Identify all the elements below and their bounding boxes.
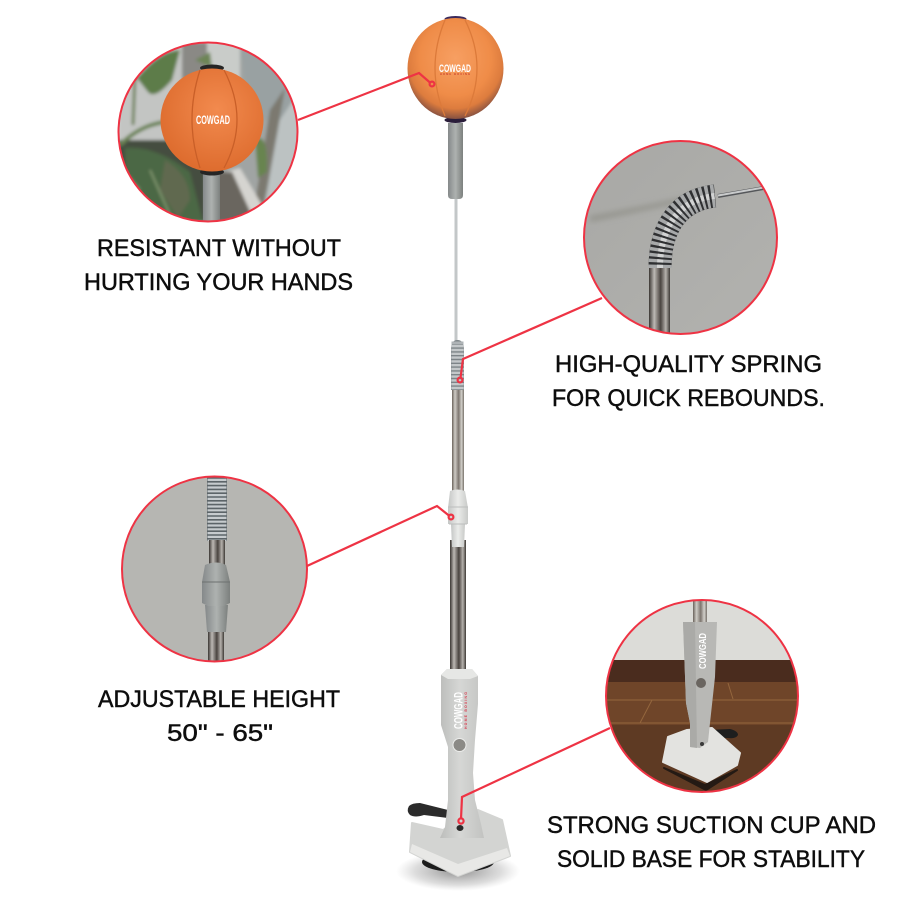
product: punching stand: [396, 16, 520, 891]
ring: [122, 476, 307, 662]
base shadow: [664, 768, 737, 790]
ring: [584, 141, 777, 334]
caption: ball: RESISTANT WITHOUT: [97, 235, 341, 262]
ring: [118, 42, 298, 222]
caption: base: [547, 812, 876, 873]
stand logo: HOME BOXING: [464, 692, 468, 729]
caption: spring: [552, 351, 825, 412]
photo: [584, 141, 778, 338]
photo: COWGAD: [196, 115, 230, 127]
panel: ball close-up: [118, 42, 300, 224]
orange ball: COWGAD: [439, 63, 471, 75]
height adjustment collar: [448, 490, 468, 547]
column top: [441, 669, 478, 679]
photo: [122, 475, 308, 664]
caption: base: STRONG SUCTION CUP AND: [547, 812, 876, 839]
connector: base: [458, 728, 610, 824]
suction cup: [422, 852, 494, 872]
caption: spring: HIGH-QUALITY SPRING: [555, 351, 822, 378]
locking lever: [408, 803, 448, 818]
spring coil: [451, 340, 464, 390]
connector: spring: [458, 298, 602, 382]
photo: COWGAD: [697, 633, 709, 669]
orange ball: HOME BOXING: [440, 72, 470, 76]
caption: height: ADJUSTABLE HEIGHT: [98, 686, 340, 713]
panel: spring close-up: [584, 141, 778, 338]
connector: ball: [298, 73, 434, 120]
orange ball: [408, 16, 504, 123]
column bolt hole: [456, 825, 464, 831]
base rim: [410, 844, 510, 876]
base column: [440, 669, 484, 838]
thin spring rod: [454, 197, 458, 342]
floor shadow: [396, 851, 520, 891]
stand logo: COWGAD: [452, 692, 466, 729]
caption: height: 50" - 65": [167, 720, 273, 747]
photo: [606, 598, 800, 795]
ring: [606, 600, 798, 792]
panel: base close-up: [606, 598, 800, 795]
caption: base: SOLID BASE FOR STABILITY: [557, 846, 865, 873]
hexagonal base: [410, 810, 510, 876]
caption: height: [98, 686, 340, 747]
panel: height adjuster close-up: [122, 475, 308, 664]
foam grip: [448, 123, 463, 199]
stand logo: [452, 692, 468, 729]
column window: [453, 738, 466, 752]
caption: spring: FOR QUICK REBOUNDS.: [552, 385, 825, 412]
connector: height collar: [307, 506, 453, 566]
caption: ball: [84, 235, 353, 296]
upper chrome pole: [452, 388, 464, 494]
caption: ball: HURTING YOUR HANDS: [84, 269, 353, 296]
lower chrome pole: [450, 540, 466, 674]
photo: [118, 42, 300, 224]
